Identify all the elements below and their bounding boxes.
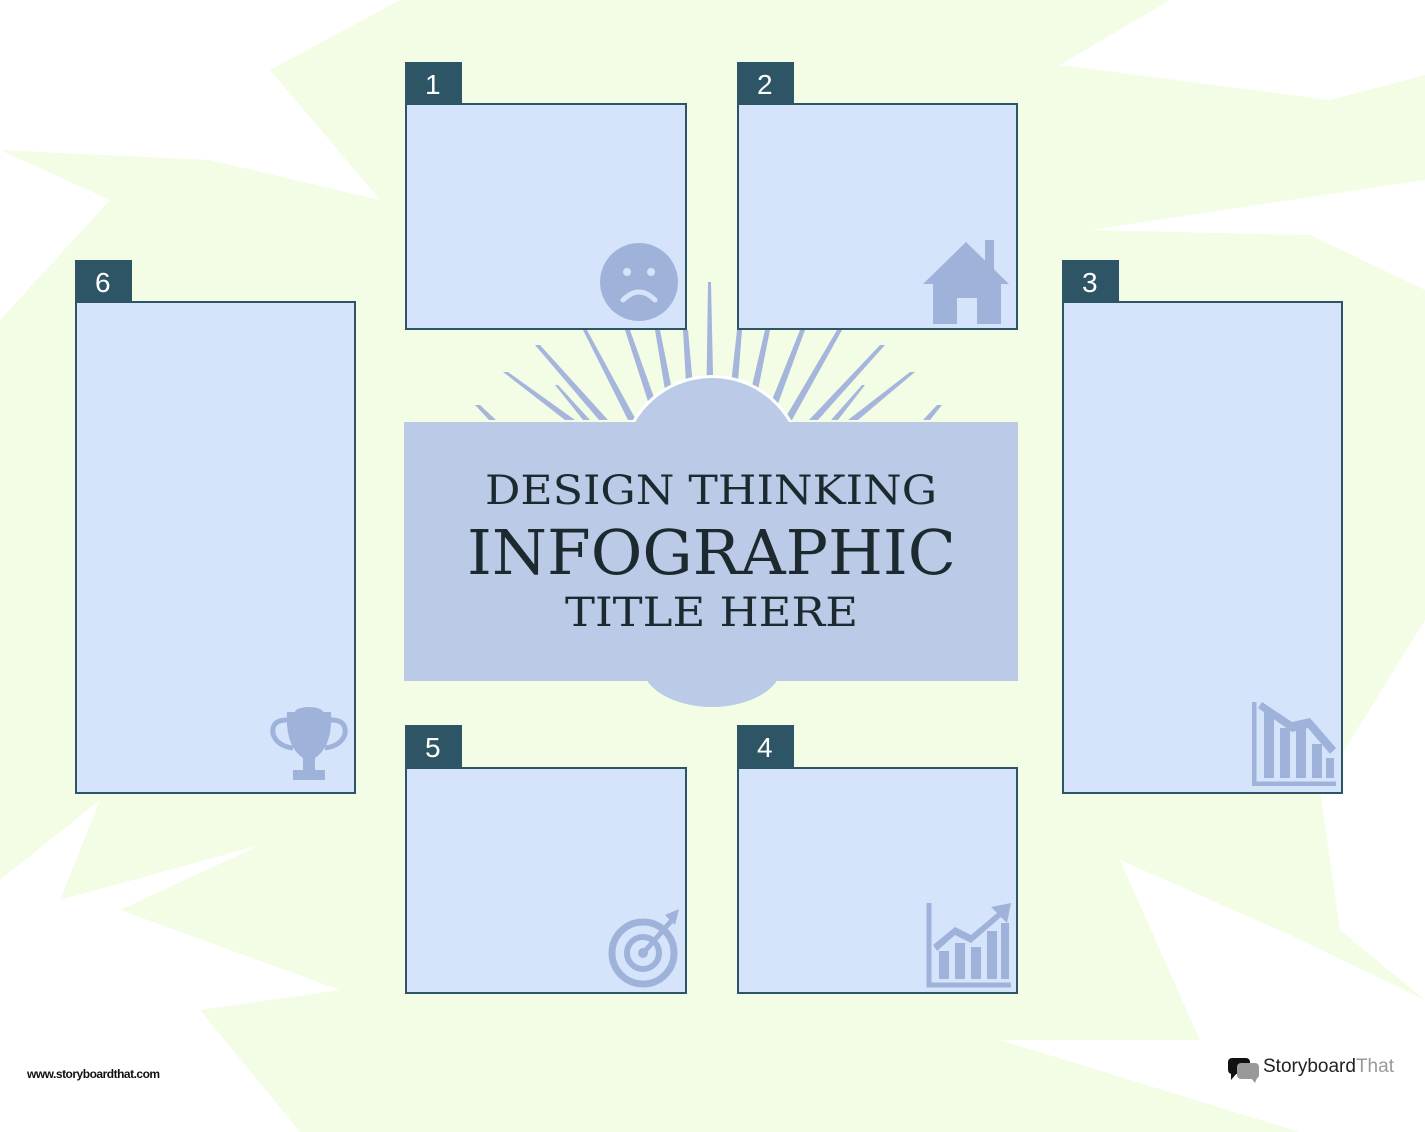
panel 5	[405, 725, 687, 994]
tab 6: 6	[95, 267, 111, 298]
panel 4	[737, 725, 1018, 994]
icon: rising chart	[926, 903, 1011, 988]
tab 4	[737, 725, 794, 767]
title panel	[404, 375, 1018, 707]
footer url: www.storyboardthat.com	[27, 1067, 160, 1081]
tab 3: 3	[1082, 267, 1098, 298]
tab 4: 4	[757, 732, 773, 763]
title text	[467, 468, 956, 636]
title text: DESIGN THINKING	[485, 468, 937, 514]
panel 6	[75, 260, 356, 794]
tab 2	[737, 62, 794, 104]
icon: declining chart	[1252, 702, 1336, 786]
logo	[1228, 1056, 1394, 1083]
title text: INFOGRAPHIC	[467, 516, 956, 589]
tab 5: 5	[425, 732, 441, 763]
panel 3	[1062, 260, 1343, 794]
icon: house	[923, 240, 1009, 324]
tab 6	[75, 260, 132, 302]
tab 3	[1062, 260, 1119, 302]
panel 2	[737, 62, 1018, 330]
icon: speech bubbles	[1228, 1058, 1259, 1083]
tab 1: 1	[425, 69, 441, 100]
icon: trophy	[270, 707, 348, 780]
icon: target	[608, 909, 679, 988]
tab 5	[405, 725, 462, 767]
tab 1	[405, 62, 462, 104]
title text: TITLE HERE	[565, 590, 858, 636]
icon: sad face	[600, 243, 678, 321]
panel 1	[405, 62, 687, 330]
tab 2: 2	[757, 69, 773, 100]
logo: StoryboardThat	[1263, 1056, 1394, 1077]
